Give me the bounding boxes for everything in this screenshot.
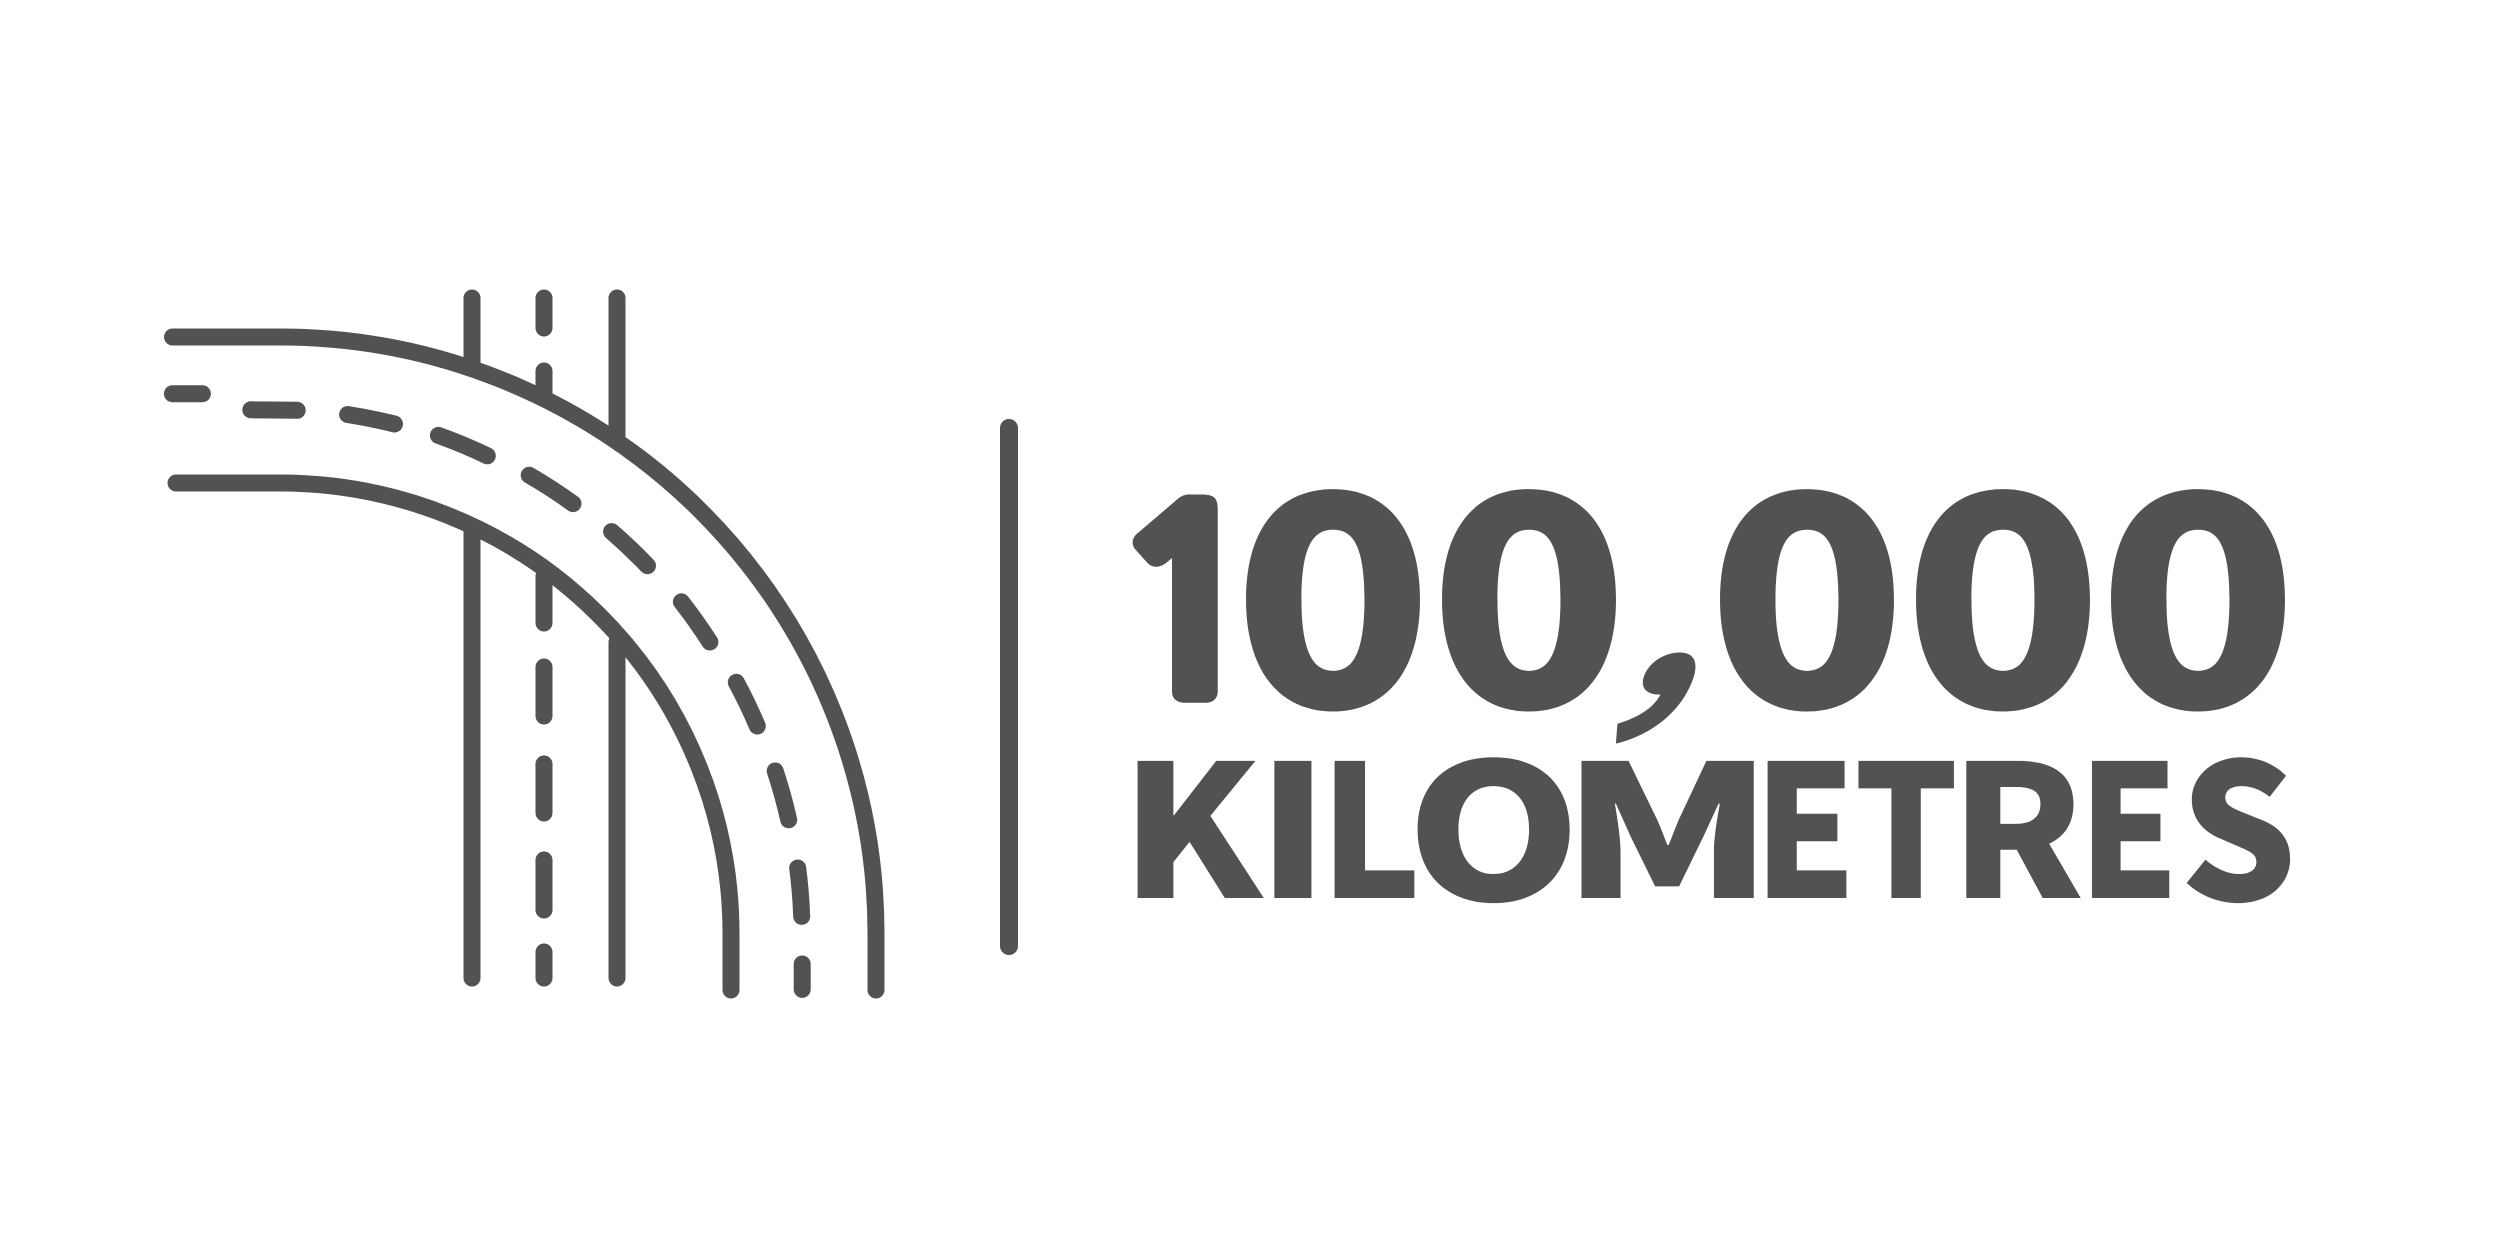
curved road: centre dashes [172,394,802,989]
heading: KILOMETRES: L [1320,685,1422,951]
straight road: left edge [464,298,480,978]
heading: KILOMETRES: M [1560,685,1774,951]
heading: KILOMETRES: I [1257,685,1329,951]
heading: KILOMETRES: O [1406,681,1581,955]
icon: curved road crossing a straight road [172,298,876,990]
heading: 100,000: 0 [1428,365,1629,793]
heading: 100,000: 0 [1232,365,1433,793]
heading: 100,000: , [1590,452,1812,757]
heading: 100,000 [1106,365,2298,793]
heading: KILOMETRES [1120,681,2297,955]
heading: KILOMETRES: E [1754,685,1856,951]
heading: KILOMETRES: E [2078,685,2179,951]
heading: KILOMETRES: K [1120,685,1264,951]
vertical divider [1000,428,1018,946]
heading: 100,000: 0 [1706,365,1907,793]
curved road: inner edge [176,483,731,990]
heading: 100,000: 0 [2098,365,2298,793]
heading: KILOMETRES: S [2180,681,2297,955]
straight road: centre dashes [536,298,552,978]
curved road: outer edge [172,337,876,990]
heading: KILOMETRES: R [1950,685,2085,951]
heading: 100,000: 0 [1902,365,2103,793]
heading: 100,000: 1 [1106,481,1272,733]
straight road: right edge [608,298,626,978]
heading: KILOMETRES: T [1854,685,1959,951]
